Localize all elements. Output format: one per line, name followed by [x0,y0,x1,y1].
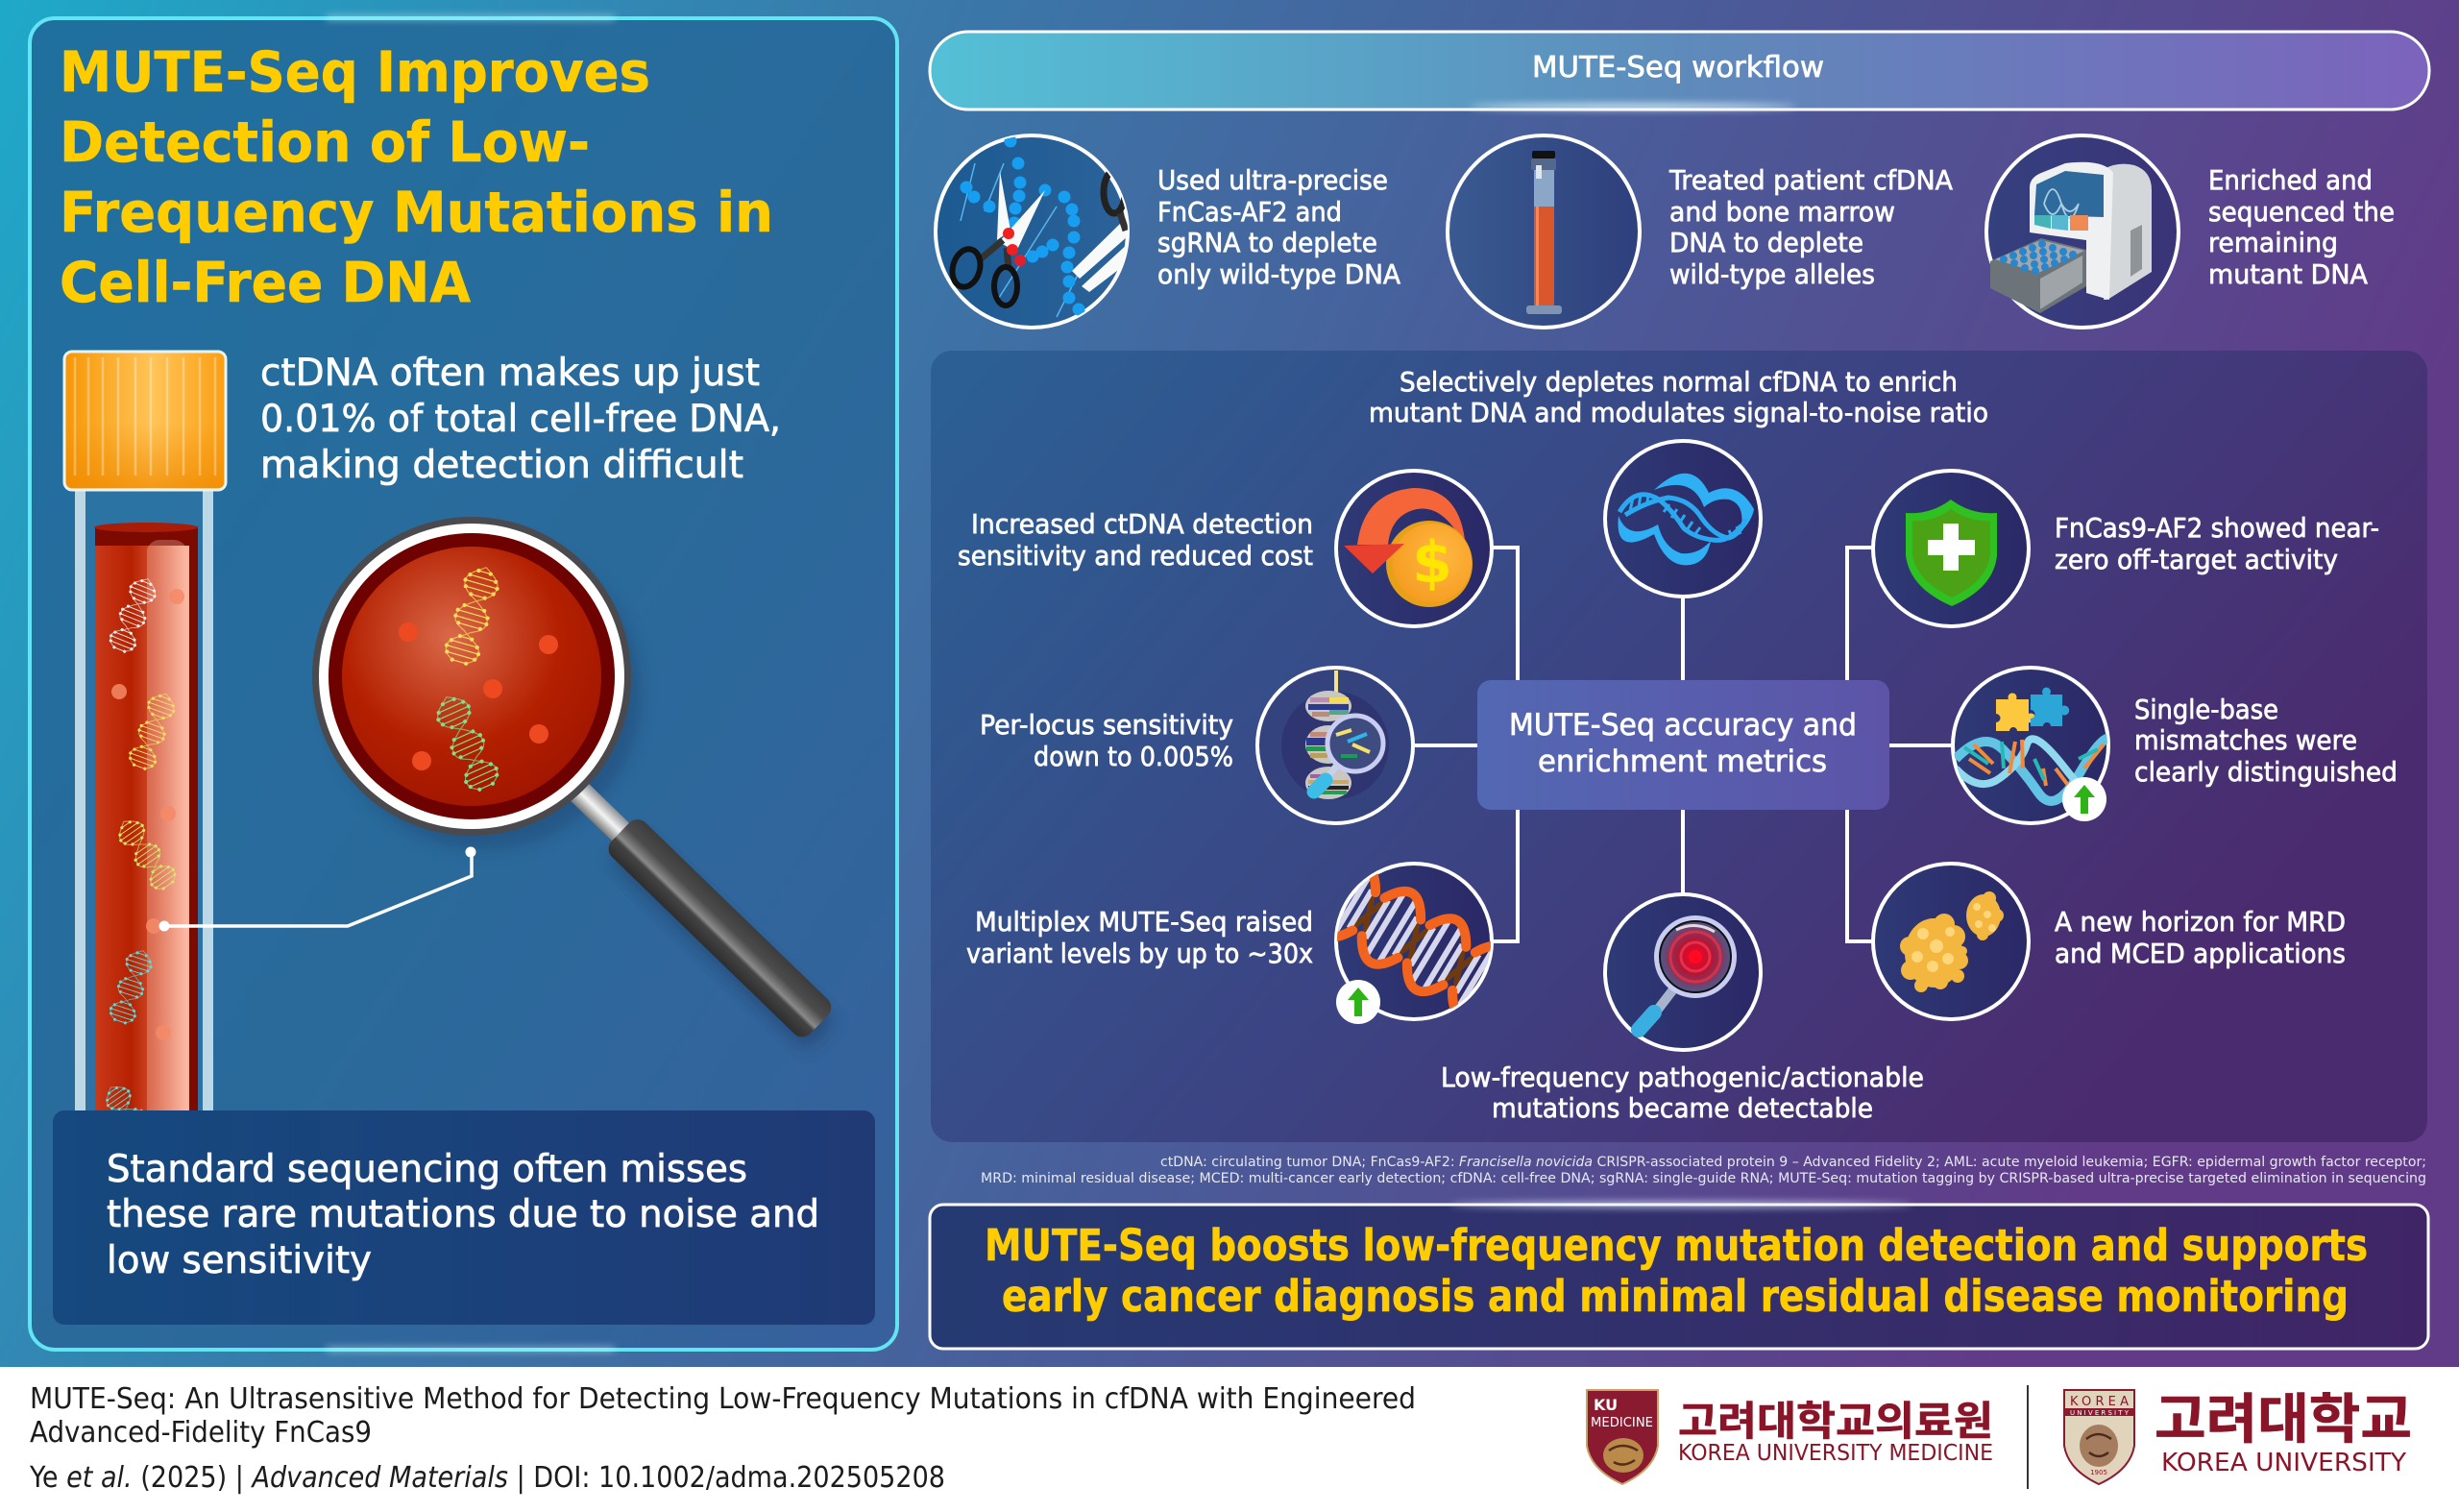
logo: Korea University: UNIVERSITY [2070,1409,2130,1417]
metric: single-base mismatches: mismatches were [2134,725,2357,756]
metric: MRD and MCED applications [1873,864,2346,1019]
title [60,39,773,315]
logo: Korea University: KOREA [2070,1395,2129,1409]
workflow step 2: wild-type alleles [1669,259,1875,290]
callout box: standard sequencing: Standard sequencing often misses [107,1148,747,1191]
workflow step 2: DNA to deplete [1669,228,1863,258]
metric: sensitivity and cost [958,471,1492,626]
title: MUTE-Seq Improves [60,39,650,105]
metric: variant levels: Multiplex MUTE-Seq raised [975,907,1313,938]
callout box: standard sequencing [53,1110,875,1325]
metric: sensitivity and cost: Increased ctDNA detection [971,509,1313,540]
logo: Korea University: KOREA UNIVERSITY [2161,1449,2406,1477]
workflow step 1: FnCas-AF2 and [1157,197,1342,228]
icon: green shield [1873,471,2029,626]
heading pill: workflow: MUTE-Seq workflow [1532,51,1824,85]
icon: tumor cell clusters [1873,864,2029,1019]
logo: Korea University Medicine [1587,1389,1993,1484]
citation: Advanced-Fidelity FnCas9 [30,1416,372,1450]
icon: orange DNA helix [1334,862,1494,1024]
logo: Korea University: 1905 [2090,1469,2107,1476]
heading: selective depletion: Selectively depletes normal cfDNA to enrich [1400,367,1958,398]
abbreviations footnote: ctDNA: circulating tumor DNA; FnCas9-AF2: Francisella novicida CRISPR-associated protein 9 – Advanced Fidelity 2; AML: acute myeloid leukemia; EGFR: epidermal growth factor receptor; [1160,1155,2426,1170]
metric: per-locus sensitivity: down to 0.005% [1034,742,1233,772]
text: ctDNA fraction: ctDNA often makes up just [260,352,760,395]
text: ctDNA fraction [260,352,781,487]
callout box: standard sequencing: these rare mutations due to noise and [107,1193,819,1236]
workflow step 2: Treated patient cfDNA [1668,165,1953,196]
logo: Korea University Medicine: 고려대학교의료원 [1678,1389,1993,1448]
logo: Korea University Medicine: MEDICINE [1591,1416,1653,1430]
icon: magnifier with target [1605,894,1761,1050]
logo: Korea University: 고려대학교 [2155,1377,2412,1454]
icon: scissors cutting DNA [936,135,1130,328]
text: ctDNA fraction: 0.01% of total cell-free DNA, [260,398,781,441]
metric: low-frequency mutations [1441,894,1924,1124]
icon: blood collection tube [64,352,226,1156]
callout box: standard sequencing: low sensitivity [107,1239,372,1282]
callout line: tube to magnifier [159,847,476,932]
metric: off-target activity: FnCas9-AF2 showed near- [2055,513,2379,544]
heading: selective depletion [1369,367,1988,428]
workflow step 1: only wild-type DNA [1157,259,1400,290]
icon: tube DNA fragments [106,578,177,1110]
workflow step 2 [1448,135,1953,328]
divider between logos [2027,1385,2029,1489]
logo: Korea University Medicine: KU [1594,1396,1618,1414]
heading pill: workflow [930,32,2429,110]
metric: MRD and MCED applications: A new horizon for MRD [2055,907,2346,938]
citation: Ye et al. (2025) | Advanced Materials | DOI: 10.1002/adma.202505208 [29,1461,945,1495]
abbreviations footnote [981,1155,2426,1186]
center box: metrics hub [1477,680,1889,810]
icon: coin with down arrow: $ [1412,529,1452,597]
metric: sensitivity and cost: sensitivity and reduced cost [958,541,1313,572]
metric: variant levels: variant levels by up to ~30x [966,939,1313,969]
metric: single-base mismatches: Single-base [2134,695,2278,725]
center box: metrics hub: enrichment metrics [1538,744,1827,779]
panel: left problem panel [30,16,897,1351]
logo: Korea University [2064,1377,2412,1484]
metric: depletion icon [1605,441,1761,597]
citation [29,1382,1416,1495]
workflow step 1: Used ultra-precise [1157,165,1388,196]
icon: puzzle pieces and DNA [1953,668,2113,823]
center box: metrics hub: MUTE-Seq accuracy and [1509,708,1857,743]
workflow step 3: sequenced the [2208,197,2395,228]
connector lines [1415,548,1952,941]
citation: MUTE-Seq: An Ultrasensitive Method for Detecting Low-Frequency Mutations in cfDNA with Engineered [30,1382,1416,1416]
icon: up arrow badge [1336,980,1380,1024]
icon: cloud with DNA [1605,441,1761,597]
conclusion box [930,1202,2428,1349]
workflow step 2: and bone marrow [1669,197,1895,228]
heading: selective depletion: mutant DNA and modulates signal-to-noise ratio [1369,398,1988,428]
title: Cell-Free DNA [60,250,471,315]
title: Detection of Low- [60,110,590,175]
metric: low-frequency mutations: Low-frequency pathogenic/actionable [1441,1062,1924,1093]
workflow step 3: mutant DNA [2208,259,2368,290]
metric: off-target activity: zero off-target activity [2055,545,2338,575]
metric: per-locus sensitivity: Per-locus sensitivity [980,710,1233,741]
metric: off-target activity [1873,471,2379,626]
workflow step 1 [936,135,1400,328]
text: ctDNA fraction: making detection difficult [260,444,743,487]
icon: coin with down arrow [1336,471,1492,626]
icon: DNA under magnifier [1257,668,1413,823]
metric: MRD and MCED applications: and MCED applications [2055,939,2346,969]
metric: single-base mismatches: clearly distinguished [2134,757,2398,788]
title: Frequency Mutations in [60,180,773,245]
workflow step 1: sgRNA to deplete [1157,228,1377,258]
logo: Korea University Medicine: KOREA UNIVERSITY MEDICINE [1678,1441,1993,1466]
metric: variant levels [966,862,1494,1024]
icon: up arrow badge [2062,777,2106,821]
workflow step 3: Enriched and [2208,165,2373,196]
panel: accuracy and enrichment metrics [29,351,2428,1495]
icon: test tube [1448,135,1640,328]
workflow step 3: remaining [2208,228,2338,258]
workflow step 3 [1986,135,2395,328]
handle [559,774,842,1052]
abbreviations footnote: MRD: minimal residual disease; MCED: multi-cancer early detection; cfDNA: cell-free DNA; sgRNA: single-guide RNA; MUTE-Seq: mutation tagging by CRISPR-based ultra-precise targeted elimination in sequencing [981,1171,2426,1186]
metric: low-frequency mutations: mutations became detectable [1492,1093,1873,1124]
icon: magnifying glass over blood [312,517,842,1052]
icon: sequencing machine [1986,135,2179,328]
metric: per-locus sensitivity [980,668,1413,823]
metric: single-base mismatches [1953,668,2398,823]
